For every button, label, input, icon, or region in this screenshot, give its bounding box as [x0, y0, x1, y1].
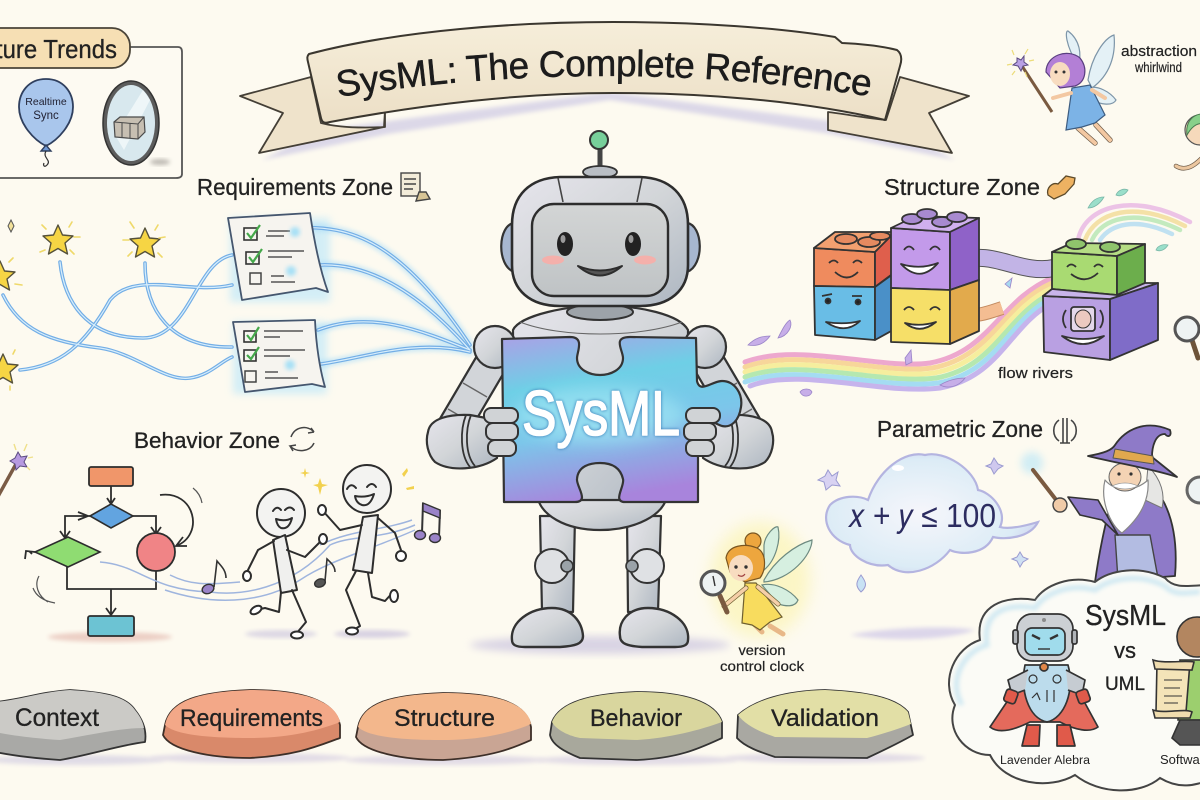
- heading: structure zone: Structure Zone: [884, 174, 1040, 200]
- stone: context: Context: [15, 704, 99, 732]
- requirements zone: [0, 173, 470, 394]
- flowchart: [25, 467, 202, 642]
- panel: sysml vs uml cloud: [949, 570, 1200, 790]
- robot ground shadow: [470, 636, 730, 654]
- label: version control clock: control clock: [720, 659, 804, 674]
- robot legs: [535, 516, 664, 612]
- wings: [1066, 31, 1116, 104]
- wand: [1022, 66, 1052, 112]
- robot feet: [512, 608, 688, 647]
- orange flow tube: [960, 308, 1002, 315]
- body: [1178, 660, 1200, 720]
- stars: [0, 220, 165, 390]
- arms: [1008, 670, 1085, 695]
- magnifier clock: [701, 571, 727, 612]
- boots: [1022, 725, 1075, 746]
- structure zone: [745, 174, 1190, 396]
- stone: structure: Structure: [394, 705, 495, 732]
- fairy at right edge: [1176, 114, 1200, 168]
- stone: requirements: [150, 690, 350, 763]
- glow orb: [1021, 452, 1043, 474]
- head and hair: [745, 533, 761, 549]
- icon: cycle arrows: [290, 428, 314, 451]
- face: [1109, 463, 1141, 491]
- puzzle piece: [502, 337, 741, 502]
- banner left tail: [240, 77, 385, 153]
- wings: [762, 527, 812, 606]
- cloud glow edge: [956, 578, 1200, 705]
- label: abstraction whirlwind: abstraction: [1121, 44, 1197, 60]
- river droplets: [748, 278, 1012, 396]
- wand tip at left edge: [0, 444, 33, 500]
- stone: context: [0, 690, 165, 765]
- comparison cloud: [949, 570, 1200, 790]
- label: abstraction whirlwind: whirlwind: [1134, 59, 1182, 75]
- robot right arm: [684, 326, 773, 468]
- robot screen face: [532, 204, 668, 296]
- music notes: [201, 503, 440, 595]
- legs: [1172, 720, 1200, 745]
- robot antenna: [583, 131, 617, 178]
- head: [1177, 617, 1200, 657]
- title banner: [239, 21, 970, 160]
- dress: [742, 583, 782, 630]
- robe: [1095, 488, 1176, 582]
- sparkles around cloud: [818, 458, 1028, 592]
- blue requirement threads: [3, 228, 470, 378]
- rainbow droplets: [1088, 189, 1168, 251]
- heading: behavior zone: Behavior Zone: [134, 428, 280, 453]
- icon: realtime sync balloon: [19, 79, 73, 166]
- checklist one: [228, 213, 328, 300]
- panel: future trends: [0, 28, 182, 178]
- wand: [1033, 470, 1057, 501]
- dancing stick figure two: [318, 465, 410, 638]
- superhero robot: [990, 614, 1098, 746]
- icon: realtime sync balloon: Realtime: [25, 96, 67, 108]
- magnifier at right edge: [1175, 317, 1199, 358]
- label: vs: vs: [1114, 638, 1136, 663]
- central robot: [427, 131, 773, 654]
- arm sleeve: [1068, 497, 1118, 535]
- dress: [1066, 85, 1105, 130]
- behavior zone: [25, 428, 440, 642]
- icon: wrench hand: [1048, 176, 1075, 199]
- banner right tail: [828, 77, 969, 153]
- icon: notepad: [401, 173, 430, 201]
- label: flow rivers: flow rivers: [998, 365, 1073, 382]
- puzzle label: SysML: [522, 379, 680, 449]
- wizard: [1021, 426, 1177, 582]
- label: version control clock: version: [738, 643, 786, 658]
- face: [1050, 62, 1070, 86]
- stone: validation: [725, 690, 925, 763]
- ground smudge: [850, 628, 975, 639]
- legs: [1078, 125, 1110, 143]
- checklist two: [233, 320, 325, 392]
- cloud formula: 𝑥 + 𝑦 ≤ 100: [848, 497, 996, 534]
- icon: realtime sync balloon: Sync: [33, 110, 59, 122]
- label: uml: UML: [1105, 674, 1145, 695]
- label: lavender: Lavender Alebra: [1000, 755, 1091, 767]
- icon: parametric symbol: [1054, 418, 1076, 443]
- magnifier behind wizard: [1187, 477, 1200, 503]
- banner main ribbon: [307, 22, 901, 123]
- lilac flow tube: [962, 258, 1054, 269]
- robot right hand: [684, 408, 720, 456]
- robot torso: [513, 304, 688, 530]
- heading: parametric zone: Parametric Zone: [877, 416, 1043, 442]
- parametric zone: [818, 416, 1076, 592]
- music waves: [100, 520, 415, 600]
- cape: [990, 672, 1098, 731]
- brick: purple: [891, 209, 979, 290]
- stone: validation: Validation: [771, 705, 879, 732]
- stone: behavior: [537, 692, 737, 765]
- fairy: abstraction: [1007, 31, 1197, 143]
- legs: [755, 625, 783, 634]
- robot left hand: [484, 408, 518, 456]
- brick: large purple: [1043, 283, 1158, 360]
- stepping stones: [0, 690, 925, 765]
- constraint cloud: [826, 454, 1038, 572]
- state circle red: [137, 533, 175, 571]
- flow end node: [88, 616, 134, 636]
- heading: requirements zone: Requirements Zone: [197, 174, 393, 200]
- banner shadow: [262, 92, 955, 160]
- label: abstraction whirlwind: [1121, 44, 1197, 75]
- checklist glow: [230, 218, 330, 394]
- fairy: version control clock: [701, 522, 812, 674]
- scroll: [1156, 662, 1190, 712]
- label: sysml: SysML: [1085, 600, 1166, 632]
- rainbow river: [745, 278, 1052, 389]
- brick: orange: [814, 232, 895, 287]
- rainbow arc upper: [1078, 205, 1190, 240]
- hat: [1088, 426, 1177, 477]
- icon: mirror with box: [103, 81, 170, 165]
- body: [1024, 665, 1070, 722]
- robot ears: [501, 223, 700, 272]
- hair: [1046, 53, 1085, 88]
- decision diamond blue: [90, 504, 133, 528]
- brick: green: [1052, 239, 1145, 295]
- head: [1017, 614, 1073, 661]
- arms: [724, 587, 778, 606]
- dancing stick figure one: [243, 489, 327, 638]
- software character: [1153, 617, 1200, 745]
- brick: yellow: [891, 280, 979, 344]
- decision diamond green: [35, 537, 100, 567]
- stone: behavior: Behavior: [590, 705, 682, 732]
- robot left arm: [427, 326, 516, 468]
- brick: blue: [814, 274, 893, 340]
- hair: [1145, 466, 1163, 508]
- sparkles: [300, 468, 414, 495]
- robot head: [512, 177, 688, 306]
- beard: [1104, 480, 1148, 533]
- stone: structure: [345, 693, 545, 765]
- stone: requirements: Requirements: [180, 705, 323, 732]
- flow start node: [89, 467, 133, 486]
- title text: SysML: The Complete Reference: [338, 49, 870, 101]
- arm: [1053, 90, 1105, 98]
- label: version control clock: [720, 643, 804, 674]
